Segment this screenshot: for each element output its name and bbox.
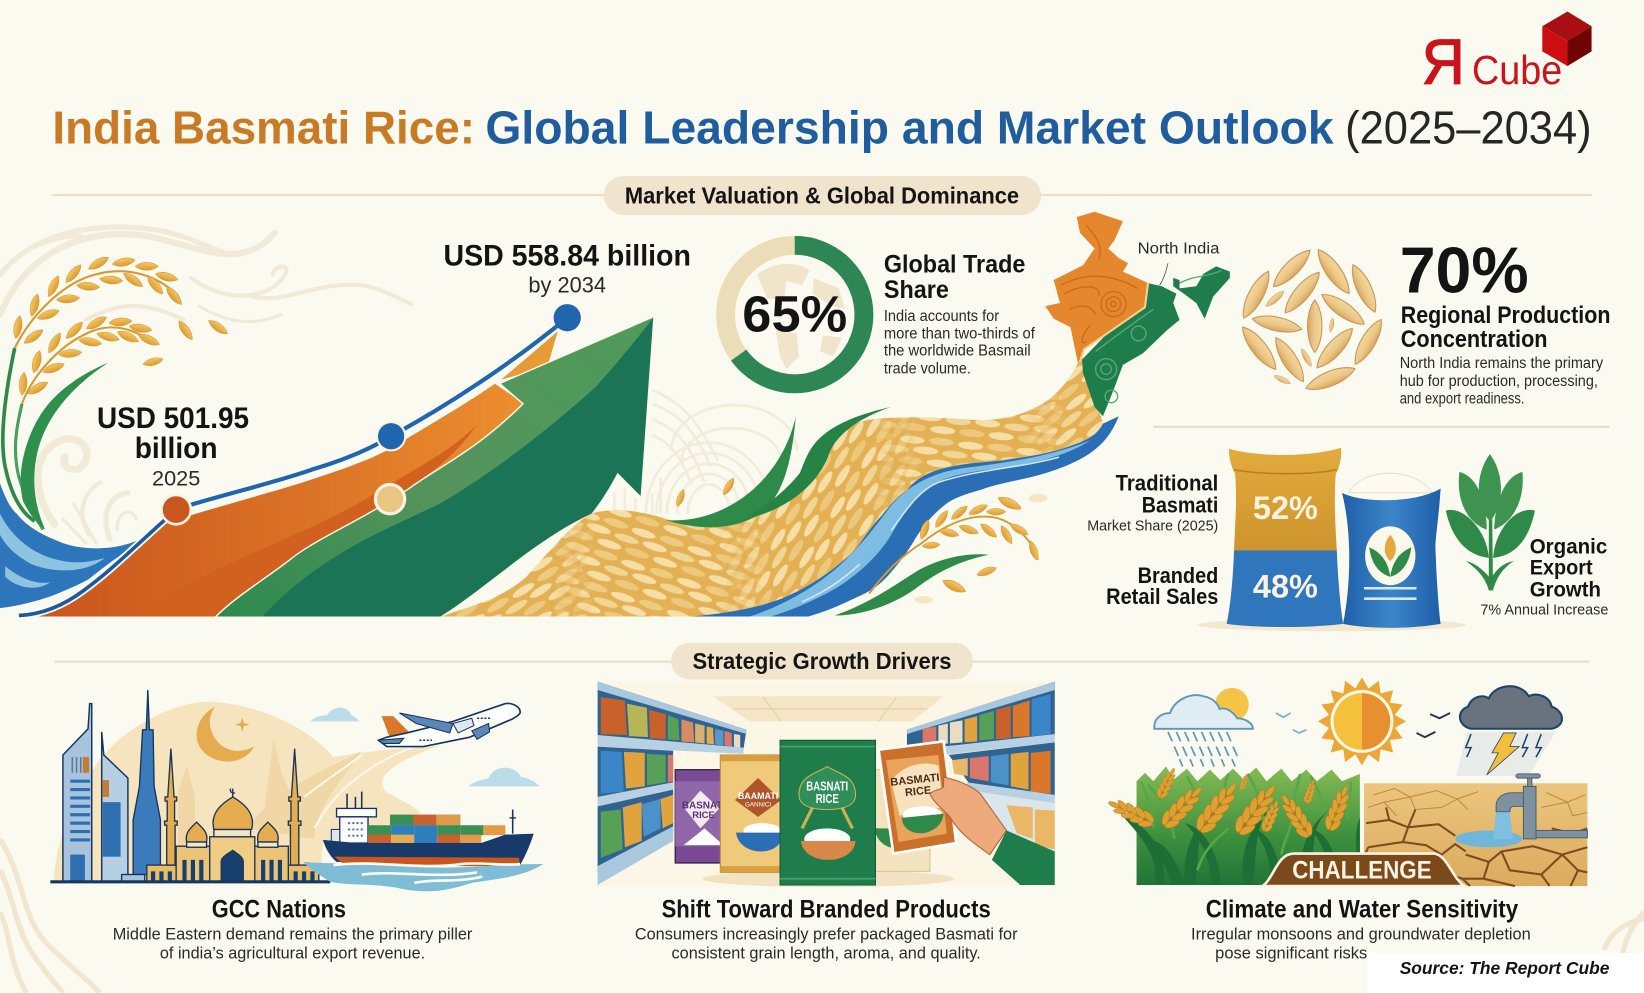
small tan grains behind river xyxy=(674,476,736,508)
fine cracks xyxy=(1368,789,1587,816)
burj tower xyxy=(122,690,160,882)
lower grains xyxy=(18,314,161,397)
marker midpoint tan xyxy=(375,484,405,514)
darker orange lower strip xyxy=(136,425,477,617)
pack: orange held rice xyxy=(879,741,956,854)
title: India Basmati Rice: xyxy=(52,102,475,154)
marker 2025 xyxy=(161,495,191,524)
golden rice ears xyxy=(1105,765,1355,843)
tower two xyxy=(102,732,128,882)
icon: organic plant xyxy=(1446,454,1535,590)
title: Global Leadership and Market Outlook xyxy=(485,102,1334,154)
airplane xyxy=(378,703,520,747)
rice blades light xyxy=(1141,774,1351,870)
swoosh white streaks xyxy=(304,747,414,828)
decorative corner swirls xyxy=(0,839,1644,993)
labels: traditional and branded share xyxy=(1087,471,1218,609)
donut chart: 65% global trade share xyxy=(726,245,864,384)
text: GCC nations: of india’s agricultural export revenue. xyxy=(160,943,425,962)
hand and sleeve xyxy=(930,777,1055,885)
logo cube xyxy=(1542,12,1592,66)
text: climate and water sensitivity xyxy=(1191,896,1531,962)
label: North India xyxy=(1138,241,1220,285)
floor patch xyxy=(702,870,954,887)
waves xyxy=(303,862,543,891)
blue product bag xyxy=(1342,473,1441,628)
illustration: climate and water challenge xyxy=(1105,677,1587,886)
text: 70% regional production concentration xyxy=(1400,234,1610,408)
map north-east region xyxy=(1173,266,1230,319)
wave: blue water at left xyxy=(0,483,165,617)
cargo ship xyxy=(323,792,534,866)
logo: RCube xyxy=(1422,12,1592,98)
green growth arrow xyxy=(217,318,653,617)
text: global trade share: trade volume. xyxy=(884,360,971,377)
river highlight xyxy=(750,440,1090,617)
text: shift toward branded products: Consumers increasingly prefer packaged Basmati for xyxy=(635,925,1018,944)
right shelf xyxy=(907,682,1055,865)
river of rice xyxy=(435,346,1127,619)
swoosh shading xyxy=(246,751,362,839)
major cracks xyxy=(1365,807,1587,886)
text: 70% regional production concentration: and export readiness. xyxy=(1400,391,1524,408)
clouds xyxy=(310,708,540,786)
blue river xyxy=(692,416,1119,617)
pack: green rice: RICE xyxy=(816,792,839,806)
rice field xyxy=(1105,765,1360,885)
text: global trade share: India accounts for xyxy=(884,308,999,325)
label: organic export growth xyxy=(1480,536,1608,618)
tower one xyxy=(63,704,92,882)
icon: rice grain cluster xyxy=(1237,245,1387,395)
star xyxy=(235,717,250,732)
source credit: Source: The Report Cube xyxy=(1400,958,1609,978)
label: USD 501.95 billion: billion xyxy=(135,432,218,465)
label: organic export growth: 7% Annual Increase xyxy=(1480,602,1608,618)
pack: orange held rice: RICE xyxy=(904,784,932,799)
water puddle and stream xyxy=(1455,830,1522,847)
text: 70% regional production concentration: 70% xyxy=(1400,234,1529,307)
orange growth band xyxy=(39,384,524,617)
pack: purple rice xyxy=(675,770,726,863)
water tap xyxy=(1496,774,1587,839)
map ornament xyxy=(1061,225,1138,343)
tan backdrop and swoosh xyxy=(53,701,440,882)
pack: yellow rice: GANNICI xyxy=(745,801,771,808)
section heading: Market Valuation & Global Dominance: Market Valuation & Global Dominance xyxy=(625,182,1019,208)
silhouette towers xyxy=(178,739,291,849)
label: USD 558.84 billion: USD 558.84 billion xyxy=(444,239,691,272)
icon: wheat stalk on river xyxy=(869,494,1047,603)
text: shift toward branded products: Shift Toward Branded Products xyxy=(662,896,991,924)
sun half and half xyxy=(1318,677,1406,765)
icon: rice stalks xyxy=(3,254,230,530)
stalk stems and leaves xyxy=(3,271,178,530)
text: GCC nations: GCC Nations xyxy=(212,896,346,924)
icon: rice bags xyxy=(1197,448,1466,631)
pack: yellow rice: BAAMATI xyxy=(738,791,778,801)
labels: traditional and branded share: Retail Sales xyxy=(1106,584,1218,609)
label: USD 501.95 billion: 2025 xyxy=(152,467,200,490)
rain cloud with sun xyxy=(1154,688,1253,767)
challenge badge xyxy=(1262,854,1465,886)
pack: purple rice: RICE xyxy=(692,809,715,820)
gold and blue split bag: 52% xyxy=(1253,490,1318,526)
label: organic export growth: Export xyxy=(1530,557,1593,580)
text: shift toward branded products xyxy=(635,896,1018,962)
pack: green rice: BASNATI xyxy=(806,780,848,794)
title xyxy=(52,102,1592,154)
labels: traditional and branded share: Traditional xyxy=(1116,471,1218,496)
ground line xyxy=(50,880,330,883)
label: USD 558.84 billion: by 2034 xyxy=(528,273,606,298)
map southern region xyxy=(1082,283,1180,416)
map region divider xyxy=(1080,283,1148,362)
text: 70% regional production concentration: North India remains the primary xyxy=(1400,355,1603,372)
gold and blue split bag: 48% xyxy=(1253,569,1318,605)
illustration: supermarket branded products xyxy=(598,682,1056,887)
ceiling panel xyxy=(713,696,944,721)
gold grain river xyxy=(435,346,1127,619)
birds xyxy=(1276,713,1306,733)
left shelf xyxy=(598,682,747,885)
label: North India: North India xyxy=(1138,241,1220,258)
pack: orange held rice: BASMATI xyxy=(890,772,940,789)
lighter green arrow shading xyxy=(217,318,653,617)
label: USD 558.84 billion xyxy=(444,239,691,298)
cracked dry soil xyxy=(1364,774,1587,886)
label: USD 501.95 billion: USD 501.95 xyxy=(97,402,249,435)
map northern region xyxy=(1045,212,1148,363)
pack: green rice xyxy=(780,740,875,885)
text: climate and water sensitivity: Climate and Water Sensitivity xyxy=(1206,896,1518,924)
text: global trade share: more than two-thirds of xyxy=(884,326,1035,343)
text: global trade share: the worldwide Basmail xyxy=(884,342,1031,359)
logo wordmark xyxy=(1422,26,1562,98)
background swirls behind chart xyxy=(0,227,411,543)
marker 2034 xyxy=(554,304,581,331)
label: organic export growth: Growth xyxy=(1530,579,1601,602)
challenge badge: CHALLENGE xyxy=(1292,857,1432,885)
mosque xyxy=(147,749,319,882)
birds dark xyxy=(1416,713,1450,737)
section heading: Strategic Growth Drivers: Strategic Growth Drivers xyxy=(693,648,951,674)
text: global trade share: Global Trade xyxy=(884,251,1025,279)
storm cloud with lightning xyxy=(1456,686,1562,776)
title: (2025–2034) xyxy=(1345,102,1592,154)
gold and blue split bag xyxy=(1227,448,1343,627)
text: global trade share: Share xyxy=(884,276,949,304)
store backdrop xyxy=(598,682,1056,886)
illustration: GCC nations xyxy=(50,690,543,891)
text: 70% regional production concentration: Regional Production xyxy=(1401,302,1610,329)
logo wordmark: Я xyxy=(1422,26,1465,98)
map: India xyxy=(1045,212,1230,416)
section heading: Market Valuation & Global Dominance xyxy=(52,176,1592,215)
pack: purple rice: BASNATI xyxy=(682,800,726,811)
section heading: Strategic Growth Drivers xyxy=(55,643,1589,679)
donut chart: 65% global trade share: 65% xyxy=(742,284,847,342)
labels: traditional and branded share: Branded xyxy=(1138,563,1218,588)
pack: cream back pack xyxy=(870,770,930,871)
text: shift toward branded products: consistent grain length, aroma, and quality. xyxy=(672,943,981,962)
source credit xyxy=(1367,953,1644,993)
text: 70% regional production concentration: Concentration xyxy=(1401,326,1548,353)
text: GCC nations: Middle Eastern demand remains the primary piller xyxy=(113,925,473,944)
rice blades dark xyxy=(1120,807,1360,885)
marker midpoint blue xyxy=(377,422,405,450)
pack: yellow rice xyxy=(720,755,783,872)
labels: traditional and branded share: Basmati xyxy=(1142,493,1218,518)
small orange tip xyxy=(501,331,558,380)
labels: traditional and branded share: Market Share (2025) xyxy=(1087,518,1218,535)
text: climate and water sensitivity: pose significant risks xyxy=(1215,943,1367,962)
background ripples behind river xyxy=(614,390,797,514)
green leaves over rice xyxy=(666,407,989,616)
text: global trade share xyxy=(884,251,1035,377)
logo wordmark: Cube xyxy=(1472,47,1562,93)
crescent moon xyxy=(197,707,254,762)
label: organic export growth: Organic xyxy=(1530,536,1608,559)
icon: globe xyxy=(757,264,845,369)
text: climate and water sensitivity: Irregular monsoons and groundwater depletion xyxy=(1191,925,1531,944)
loose grains xyxy=(142,317,230,368)
text: 70% regional production concentration: hub for production, processing, xyxy=(1400,373,1598,390)
river white streaks xyxy=(802,457,1059,602)
upper grains xyxy=(12,254,184,346)
chart: market growth arrow xyxy=(39,318,653,617)
label: USD 501.95 billion xyxy=(97,402,249,490)
text: GCC nations xyxy=(113,896,473,962)
growth line with markers xyxy=(19,304,581,616)
